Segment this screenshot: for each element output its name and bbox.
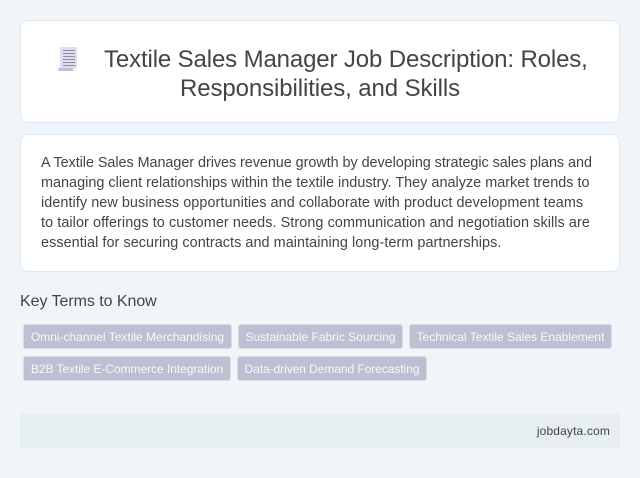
title: Responsibilities, and Skills <box>180 75 460 102</box>
tag <box>23 356 231 381</box>
tag <box>237 356 427 381</box>
title <box>104 46 588 102</box>
tag <box>238 324 403 349</box>
tag: Omni-channel Textile Merchandising <box>31 330 224 344</box>
description panel <box>20 134 620 272</box>
header panel <box>20 20 620 123</box>
footer source: jobdayta.com <box>537 424 610 438</box>
key terms tags <box>23 324 612 381</box>
description text: to tailor offerings to customer needs. Strong communication and negotiation skills are <box>41 215 590 231</box>
tag <box>409 324 612 349</box>
description text <box>41 155 592 251</box>
tag <box>23 324 232 349</box>
tag: Technical Textile Sales Enablement <box>417 330 604 344</box>
description text: managing client relationships within the textile industry. They analyze market trends to <box>41 175 590 191</box>
tag: B2B Textile E-Commerce Integration <box>31 362 223 376</box>
footer bar <box>20 414 620 448</box>
tag: Data-driven Demand Forecasting <box>245 362 419 376</box>
title: Textile Sales Manager Job Description: Roles, <box>104 46 588 73</box>
description text: essential for securing contracts and maintaining long-term partnerships. <box>41 235 501 251</box>
tag: Sustainable Fabric Sourcing <box>245 330 396 344</box>
description text: A Textile Sales Manager drives revenue growth by developing strategic sales plans and <box>41 155 592 171</box>
icon: document <box>58 47 77 71</box>
description text: identify new business opportunities and collaborate with product development teams <box>41 195 583 211</box>
key terms heading: Key Terms to Know <box>20 293 157 310</box>
